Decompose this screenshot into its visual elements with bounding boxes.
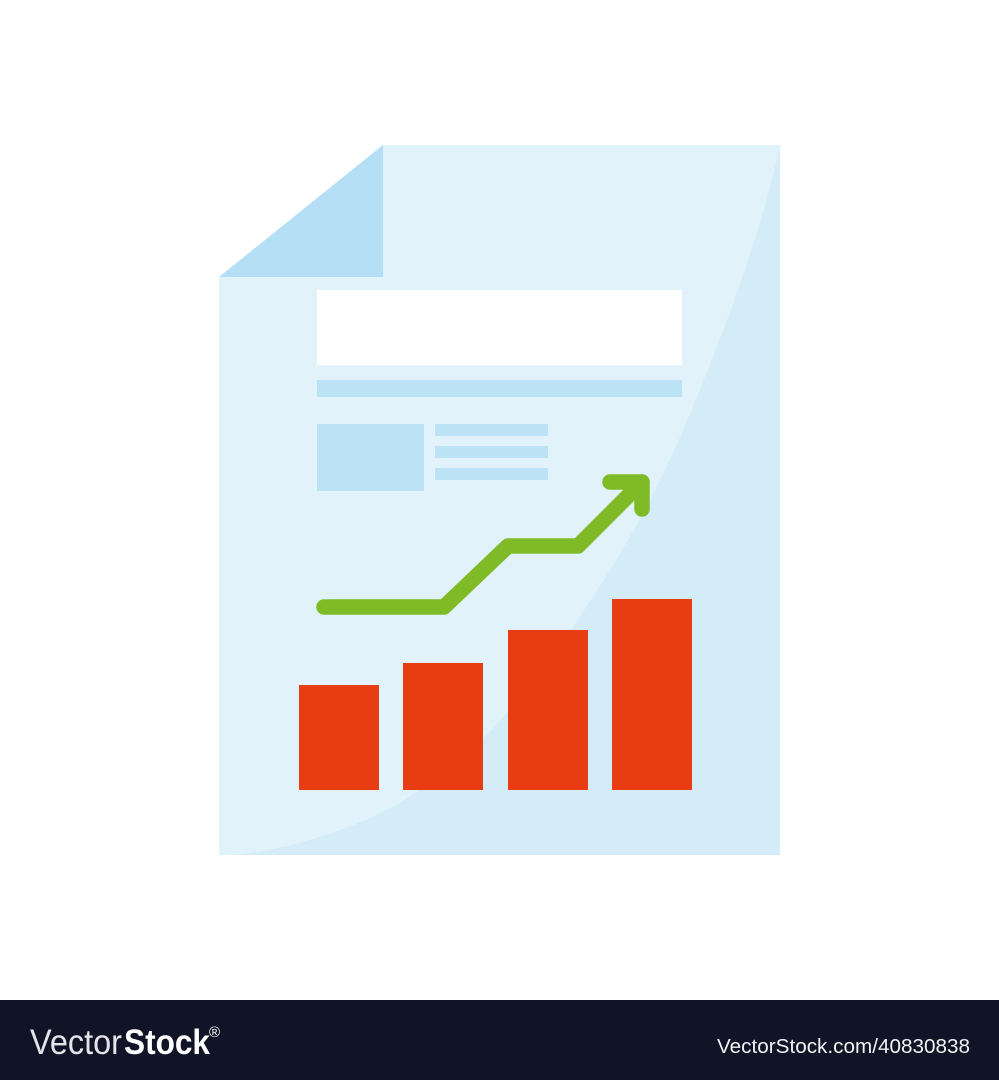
subtitle bar xyxy=(317,380,682,397)
folded corner xyxy=(219,145,383,277)
footer bar xyxy=(0,1000,999,1080)
bar chart xyxy=(299,599,692,790)
page sheet xyxy=(219,145,780,855)
footer logo: Vector xyxy=(30,1023,122,1062)
panel: document page xyxy=(219,145,780,855)
title block xyxy=(317,290,682,365)
image placeholder xyxy=(317,424,424,491)
footer logo: Stock xyxy=(124,1023,210,1062)
arrow: rising trend line xyxy=(324,482,642,607)
page shaded curve xyxy=(235,147,780,855)
footer image id: VectorStock.com/40830838 xyxy=(717,1036,970,1058)
footer logo xyxy=(30,1023,210,1062)
text lines xyxy=(435,424,548,480)
registered mark: ® xyxy=(209,1024,220,1041)
